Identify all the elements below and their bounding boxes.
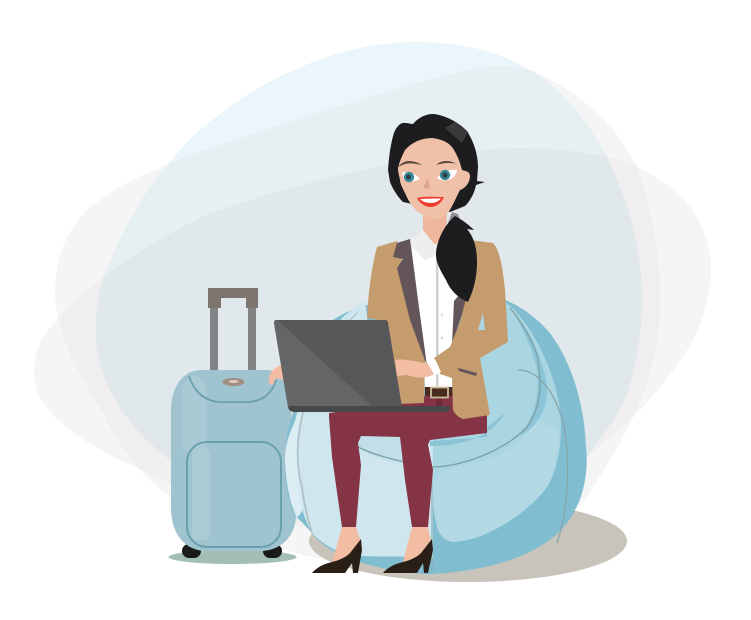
laptop [274,320,450,412]
left foot [332,527,361,562]
bag seat crescent [512,310,547,436]
bag seams [298,308,568,573]
hair highlight [445,122,468,143]
shirt cuff [428,359,441,375]
shirt collar [410,230,445,261]
left eye [402,172,420,182]
suitcase body [171,370,296,551]
suitcase shadow [168,550,296,564]
suitcase lock [222,378,244,386]
right shoe [383,539,433,573]
head [388,114,485,219]
left shoe [312,539,362,573]
nose [423,178,430,189]
bag left lobe [291,300,433,558]
jacket pocket [458,368,477,376]
laptop screen highlight [274,320,373,407]
bean bag [285,297,587,574]
eyebrows [398,161,456,167]
shirt [411,240,458,388]
pants waist [420,396,457,412]
suitcase handle [208,288,258,373]
legs [329,403,487,527]
bag right light panel [433,300,561,542]
jacket left lapel [393,239,427,366]
ponytail [436,212,477,302]
bag between legs [358,436,405,464]
bag shadow under thigh [430,413,505,446]
left hand on suitcase [269,365,284,385]
neck [423,210,447,246]
jacket right side and sleeve [434,240,508,419]
right foot [403,527,431,562]
suitcase wheels [182,544,282,558]
right eye [437,170,457,180]
background blobs [34,42,711,560]
right hand [395,359,434,378]
bean bag ground shadow [309,500,627,582]
face [398,138,470,219]
suitcase [171,288,296,558]
hair [388,114,485,212]
gap between sleeve and body [478,313,485,330]
jacket left front [367,241,425,404]
belt [425,387,453,398]
laptop screen [274,320,402,407]
bag left highlight [285,408,303,517]
woman [274,114,508,573]
belt buckle [431,388,448,398]
mouth [417,197,444,207]
illustration: businesswoman working on laptop [34,42,711,582]
bag base [285,297,587,574]
laptop base [288,406,450,412]
bag front highlight [433,420,558,542]
jacket right lapel [452,250,478,345]
